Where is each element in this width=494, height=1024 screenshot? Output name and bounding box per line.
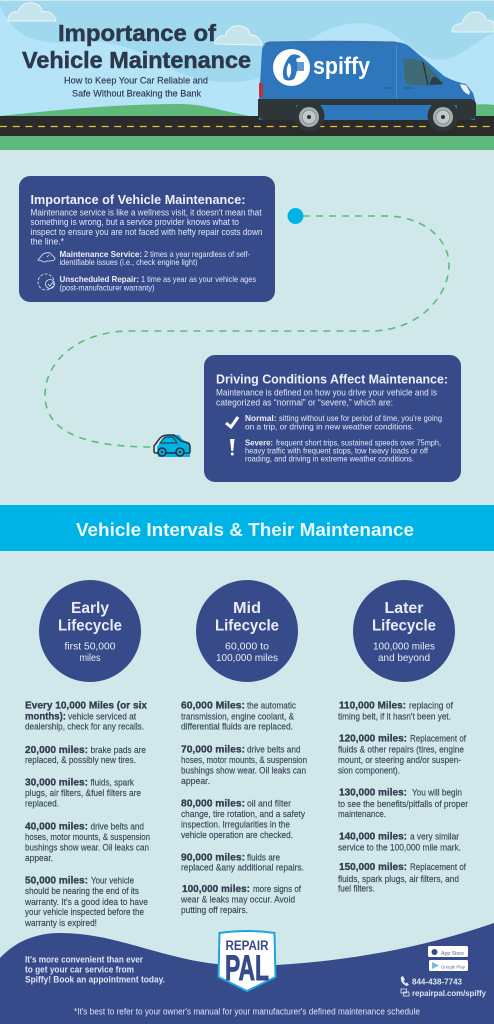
title: [22, 20, 251, 73]
icon: chat bubbles: [401, 989, 409, 996]
20,000 miles: replaced, & possibly new tires.: [25, 755, 136, 766]
40,000 miles: hoses, motor mounts, & suspension: [25, 832, 150, 843]
column: later lifecycle intervals: [338, 700, 469, 894]
30,000 miles: 30,000 miles:: [25, 778, 88, 788]
icon: gear with check: [38, 274, 54, 290]
10,000 miles: dealership, check for any recalls.: [25, 722, 144, 732]
lifecycle circle: mid: 60,000 to: [225, 640, 269, 652]
icon: exclamation mark: [230, 439, 234, 456]
60,000 miles: 60,000 Miles:: [181, 700, 245, 712]
130,000 miles: You will begin: [412, 788, 462, 798]
maintenance service item: Maintenance Service:: [60, 249, 142, 259]
panel body text: [30, 208, 262, 246]
120,000 miles: sion component).: [338, 766, 400, 776]
40,000 miles: 40,000 miles:: [25, 822, 88, 832]
30,000 miles: plugs, air filters, &fuel filters are: [25, 788, 141, 799]
repairpal logo: REPAIR: [226, 938, 269, 953]
40,000 miles: [25, 822, 150, 864]
120,000 miles: [338, 734, 466, 776]
80,000 miles: oil and filter: [247, 798, 292, 810]
footer band: [0, 923, 494, 1024]
130,000 miles: [338, 788, 469, 820]
normal item: on a trip, or driving in new weather conditions.: [245, 422, 414, 432]
repairpal logo: [218, 931, 276, 991]
70,000 miles: drive belts and: [247, 744, 300, 756]
subtitle: How to Keep Your Car Reliable and: [64, 76, 208, 86]
100,000 miles: more signs of: [253, 884, 301, 895]
90,000 miles: [181, 852, 304, 874]
panel body text: Maintenance service is like a wellness visit, it doesn't mean that: [30, 208, 262, 218]
column: early lifecycle intervals: [24, 700, 150, 929]
150,000 miles: 150,000 miles:: [339, 862, 407, 873]
cloud: left: [8, 3, 56, 21]
normal item: Normal:: [245, 413, 277, 423]
icon: phone: [401, 976, 409, 986]
call to action: It's more convenient than ever: [25, 954, 144, 964]
unscheduled repair item: [60, 274, 256, 292]
120,000 miles: 120,000 miles:: [339, 734, 407, 744]
150,000 miles: [338, 862, 466, 894]
lifecycle circle: later: Later: [384, 600, 424, 617]
cloud: right: [452, 12, 494, 32]
50,000 miles: your vehicle inspected before the: [25, 907, 144, 918]
rear wheel: [294, 100, 324, 132]
40,000 miles: bushings show wear. Oil leaks can: [25, 842, 149, 854]
50,000 miles: [24, 876, 148, 929]
icon: small car: [154, 435, 190, 457]
lifecycle circle: early: miles: [80, 652, 100, 664]
80,000 miles: inspection. Irregularities in the: [181, 820, 290, 830]
90,000 miles: replaced &any additional repairs.: [181, 862, 304, 874]
lifecycle circle: mid: Mid: [233, 600, 261, 617]
panel heading: Importance of Vehicle Maintenance:: [30, 193, 246, 207]
lifecycle circle: mid: 100,000 miles: [216, 652, 278, 664]
30,000 miles: replaced.: [25, 798, 59, 810]
30,000 miles: fluids, spark: [90, 778, 134, 788]
unscheduled repair item: Unscheduled Repair:: [60, 274, 139, 284]
unscheduled repair item: 1 time as year as your vehicle ages: [141, 274, 256, 284]
spiffy van: [258, 41, 476, 132]
panel body text: Maintenance is defined on how you drive your vehicle and is: [216, 388, 437, 398]
normal item: sitting without use for period of time, you're going: [279, 413, 442, 423]
panel body text: something is wrong, but a service provider knows what to: [30, 217, 239, 227]
130,000 miles: to see the benefits/pitfalls of proper: [338, 799, 469, 810]
70,000 miles: appear.: [181, 776, 210, 787]
80,000 miles: 80,000 miles:: [181, 798, 245, 810]
lifecycle circle: later: 100,000 miles: [373, 640, 435, 652]
windshield and side window: [403, 59, 443, 85]
110,000 miles: replacing of: [409, 700, 453, 712]
call to action: [25, 954, 165, 984]
front wheel: [428, 100, 458, 132]
badge: app store: App Store: [441, 951, 464, 957]
severe item: roading, and driving in extreme weather conditions.: [245, 454, 414, 464]
severe item: frequent short trips, sustained speeds over 75mph,: [276, 438, 441, 448]
phone number: 844-438-7743: [412, 976, 462, 986]
100,000 miles: wear & leaks may occur. Avoid: [180, 894, 295, 906]
panel: driving conditions: [204, 355, 461, 482]
spiffy logo: spiffy: [313, 53, 371, 80]
panel body text: the line.*: [30, 236, 64, 246]
panel body text: [216, 388, 437, 408]
banner: section heading: [0, 505, 494, 551]
footnote: *It's best to refer to your owner's manual for your manufacturer's defined maintenance schedule: [74, 1006, 420, 1016]
150,000 miles: Replacement of: [410, 862, 466, 873]
140,000 miles: [338, 832, 461, 854]
panel: importance of vehicle maintenance: [19, 176, 275, 302]
10,000 miles: [25, 700, 147, 732]
lifecycle circle: later: and beyond: [378, 652, 430, 664]
lifecycle circle: mid: [196, 580, 298, 682]
100,000 miles: [180, 884, 301, 916]
90,000 miles: fluids are: [247, 852, 280, 864]
20,000 miles: [25, 745, 146, 766]
10,000 miles: months):: [25, 712, 66, 722]
70,000 miles: 70,000 miles:: [181, 744, 245, 756]
110,000 miles: timing belt, if it hasn't been yet.: [338, 712, 451, 722]
50,000 miles: warranty is expired!: [24, 918, 97, 929]
10,000 miles: vehicle serviced at: [68, 712, 136, 722]
badge: app store: [428, 946, 468, 957]
call to action: to get your car service from: [25, 964, 134, 974]
80,000 miles: vehicle operation are checked.: [181, 830, 293, 841]
panel body text: categorized as “normal” or “severe,” which are:: [216, 398, 393, 408]
severe item: heavy traffic with frequent stops, tow heavy loads or off: [245, 446, 429, 456]
title: Importance of: [58, 20, 216, 46]
banner: section heading: Vehicle Intervals & Their Maintenance: [76, 519, 414, 540]
lifecycle circle: later: [353, 580, 455, 682]
maintenance service item: identifiable issues (i.e., check engine light): [60, 257, 198, 267]
120,000 miles: fluids & other repairs (tires, engine: [338, 744, 464, 756]
140,000 miles: a very similar: [410, 832, 460, 842]
60,000 miles: the automatic: [247, 700, 296, 712]
50,000 miles: 50,000 miles:: [25, 876, 88, 886]
70,000 miles: [181, 744, 307, 787]
90,000 miles: 90,000 miles:: [181, 852, 245, 864]
lifecycle circle: early: Lifecycle: [58, 618, 122, 634]
normal item: [245, 413, 442, 432]
110,000 miles: 110,000 Miles:: [339, 700, 406, 712]
10,000 miles: Every 10,000 Miles (or six: [25, 700, 147, 712]
150,000 miles: fluids, spark plugs, air filters, and: [338, 874, 459, 885]
maintenance service item: [60, 249, 250, 267]
80,000 miles: [181, 798, 305, 841]
20,000 miles: 20,000 miles:: [25, 745, 88, 756]
maintenance service item: 2 times a year regardless of self-: [144, 249, 250, 259]
100,000 miles: putting off repairs.: [181, 905, 248, 916]
140,000 miles: service to the 100,000 mile mark.: [338, 842, 461, 854]
unscheduled repair item: (post-manufacturer warranty): [60, 282, 155, 292]
20,000 miles: brake pads are: [90, 745, 146, 756]
150,000 miles: fuel filters.: [338, 884, 375, 894]
call to action: Spiffy! Book an appointment today.: [25, 974, 165, 984]
bumper and trim: [258, 99, 476, 120]
lifecycle circle: early: Early: [71, 600, 109, 617]
70,000 miles: hoses, motor mounts, & suspension: [181, 755, 307, 766]
title: Vehicle Maintenance: [22, 47, 251, 73]
50,000 miles: Your vehicle: [91, 876, 134, 886]
60,000 miles: transmission, engine coolant, &: [181, 712, 295, 722]
120,000 miles: mount, or steering and/or suspen-: [338, 755, 461, 766]
60,000 miles: differential fluids are replaced.: [181, 722, 293, 732]
panel body text: inspect to ensure you are not faced with hefty repair costs down: [30, 227, 262, 237]
lifecycle circle: later: Lifecycle: [372, 618, 436, 634]
40,000 miles: appear.: [25, 853, 53, 864]
60,000 miles: [181, 700, 296, 732]
dashed route: [45, 208, 449, 447]
50,000 miles: should be nearing the end of its: [25, 886, 139, 897]
repairpal logo: PAL: [225, 949, 269, 988]
30,000 miles: [25, 778, 141, 810]
cloud: middle: [215, 26, 262, 45]
column: mid lifecycle intervals: [180, 700, 307, 916]
icon: car outline: [38, 253, 55, 262]
120,000 miles: Replacement of: [410, 734, 466, 744]
110,000 miles: [338, 700, 453, 722]
header scene: [0, 1, 494, 150]
panel heading: Driving Conditions Affect Maintenance:: [216, 372, 448, 386]
140,000 miles: 140,000 miles:: [339, 832, 407, 842]
130,000 miles: 130,000 miles:: [339, 788, 407, 798]
130,000 miles: maintenance.: [338, 809, 386, 820]
start dot: [288, 208, 304, 224]
badge: google play: Google Play: [441, 964, 466, 970]
severe item: Severe:: [245, 438, 273, 448]
icon: check mark: [226, 417, 238, 427]
website: repairpal.com/spiffy: [412, 988, 486, 998]
40,000 miles: drive belts and: [90, 822, 144, 832]
spiffy logo: [273, 49, 371, 86]
lifecycle circle: early: first 50,000: [64, 640, 116, 652]
lifecycle circle: mid: Lifecycle: [215, 618, 279, 634]
70,000 miles: bushings show wear. Oil leaks can: [181, 766, 306, 776]
severe item: [245, 438, 441, 464]
50,000 miles: warranty. It's a good idea to have: [24, 897, 148, 908]
badge: google play: [429, 960, 468, 971]
80,000 miles: change, tire rotation, and a safety: [181, 809, 305, 820]
subtitle: Safe Without Breaking the Bank: [72, 88, 201, 100]
subtitle: [64, 76, 208, 100]
100,000 miles: 100,000 miles:: [182, 884, 250, 895]
lifecycle circle: early: [39, 580, 141, 682]
